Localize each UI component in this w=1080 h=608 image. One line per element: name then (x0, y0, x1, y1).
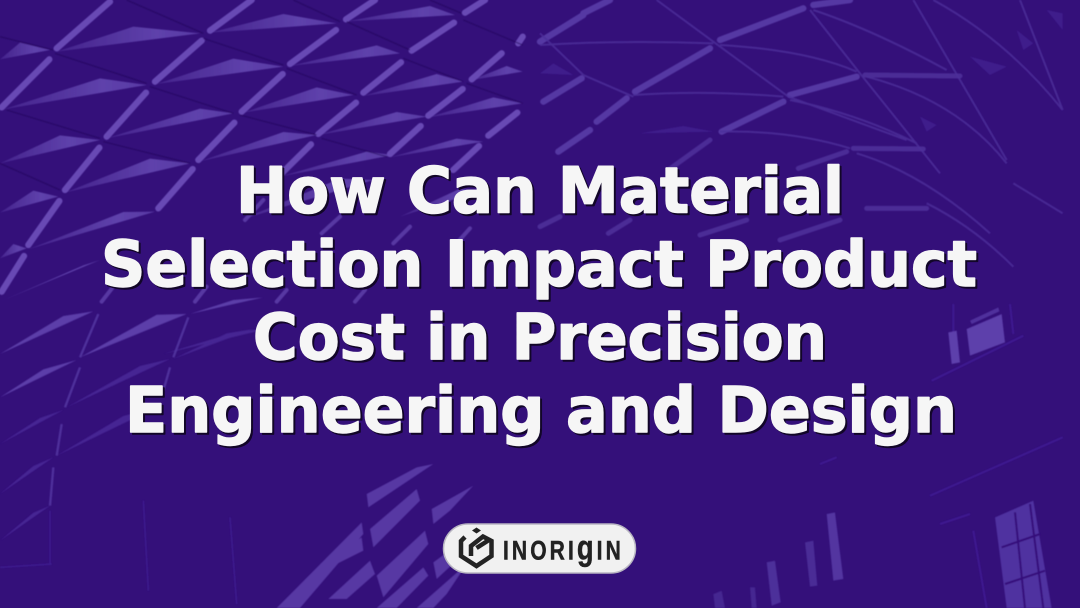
background: lower window (995, 501, 1052, 608)
title: Cost in Precision (253, 301, 827, 374)
title: Cost in Precision (255, 303, 829, 376)
background: upper-left roof lattice (0, 0, 523, 302)
icon: hexagonal cube mark (461, 528, 492, 566)
background: lower-right hall windows (713, 304, 1063, 608)
background: upper window (948, 307, 1005, 364)
background: lower-left roof lattice (0, 297, 477, 608)
wordmark: INORIgIN (503, 528, 621, 567)
title: Engineering and Design (125, 374, 957, 447)
background: upper-right curved roof struts (540, 0, 1063, 267)
logo badge (444, 524, 636, 573)
title: Selection Impact Product (103, 230, 979, 303)
background: narrow slit windows (713, 512, 843, 608)
title: How Can Material (236, 154, 844, 228)
title (101, 154, 979, 449)
title: Engineering and Design (127, 376, 959, 449)
background: lower-centre lattice patch (277, 464, 477, 608)
title: How Can Material (238, 156, 846, 230)
title: Selection Impact Product (101, 228, 977, 301)
